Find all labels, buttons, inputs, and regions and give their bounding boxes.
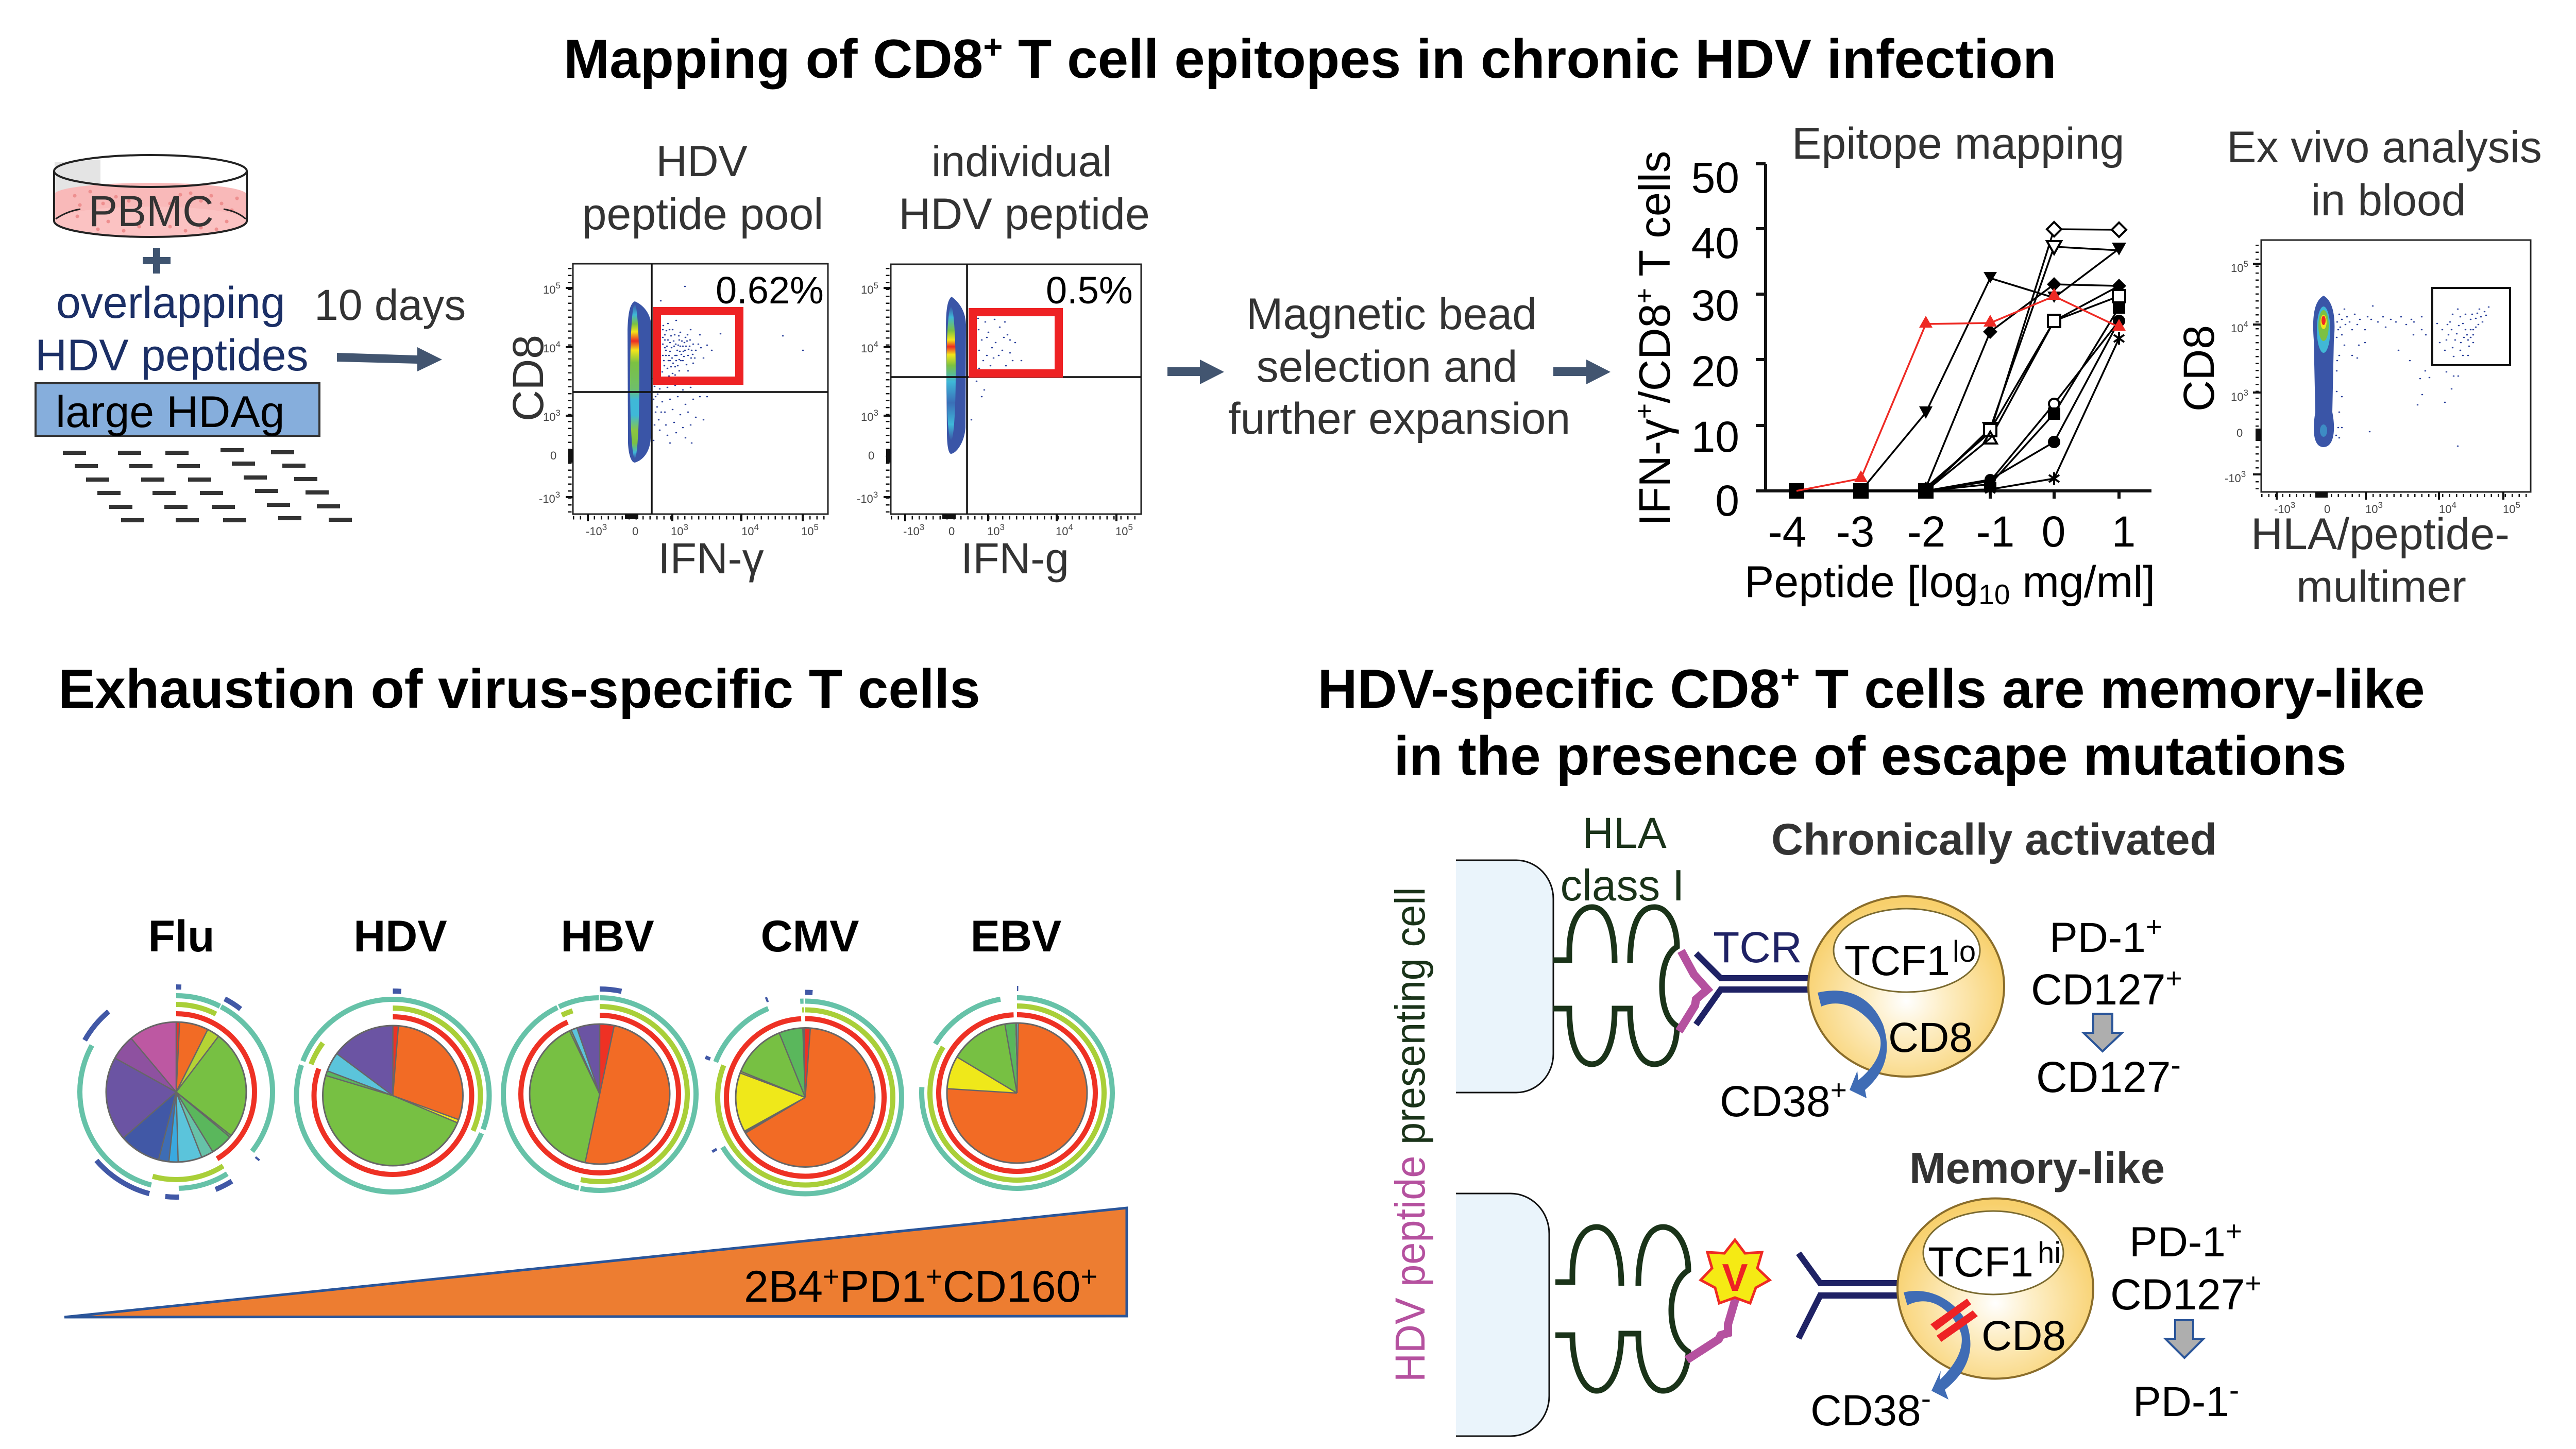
tick labels: 5: [2515, 500, 2520, 510]
antigen presenting cell: [1456, 1194, 1549, 1436]
axes: [1756, 164, 2151, 499]
heading: Memory-like: Memory-like: [1909, 1144, 2165, 1193]
HLA molecule: [1553, 907, 1677, 1064]
panel: chronically activated: [1456, 809, 2217, 1126]
y axis label: CD8: CD8: [2175, 325, 2223, 412]
y axis title: +: [1630, 403, 1659, 419]
gate: red: [657, 311, 739, 381]
y axis title: IFN-γ: [1631, 419, 1680, 526]
y tick labels: [1691, 154, 1739, 525]
heading: Chronically activated: Chronically activated: [1771, 815, 2217, 864]
tick labels: 5: [814, 522, 819, 532]
icon: escape mutation star: [1701, 1240, 1770, 1303]
scattered events: [653, 286, 803, 443]
pie: HDV: [266, 912, 519, 1222]
panel: PBMC culture setup: [35, 155, 352, 522]
pie: HBV: [471, 912, 728, 1222]
text: magnetic bead selection: selection and: [1257, 342, 1517, 391]
tick labels: 0: [2324, 503, 2330, 516]
arrow: to peptide pool: [337, 347, 442, 371]
plot frame: [2261, 240, 2531, 492]
y tick labels: 20: [1691, 347, 1739, 396]
scattered events: [2336, 306, 2489, 446]
label: CD38+: CD38: [1720, 1077, 1831, 1126]
y tick labels: 30: [1691, 281, 1739, 330]
heading: Ex vivo analysis in blood: in blood: [2311, 176, 2466, 225]
y tick labels: 0: [1715, 476, 1739, 525]
tick labels: -10: [903, 525, 920, 538]
panel: flow plot HDV peptide pool: [504, 137, 828, 583]
label: PD-1+ CD127+: PD-1: [2129, 1219, 2226, 1266]
label: CD38+: +: [1831, 1074, 1847, 1106]
label: 10 days: 10 days: [314, 281, 466, 329]
tick labels: 4: [873, 339, 878, 349]
tick labels: 0: [550, 449, 556, 462]
tick labels: -10: [586, 525, 602, 538]
label: CD38-: CD38: [1810, 1386, 1921, 1435]
x tick labels: -2: [1907, 507, 1945, 556]
label: PBMC: PBMC: [89, 187, 214, 235]
data series: red: [1797, 288, 2126, 491]
y axis title: +: [1630, 288, 1659, 303]
label: overlapping HDV peptides: overlapping: [56, 278, 285, 328]
tick labels: -10: [2274, 503, 2291, 516]
heading: Ex vivo analysis in blood: Ex vivo analysis: [2227, 123, 2542, 172]
heading: memory-like: [1317, 658, 2425, 787]
tick labels: 4: [754, 522, 759, 532]
tick labels: 10: [861, 283, 873, 296]
TCR: [1696, 953, 1808, 1025]
tick labels: 3: [2291, 500, 2295, 510]
icon: escape mutation star: V: [1722, 1256, 1748, 1299]
heading: HDV peptide pool: peptide pool: [582, 190, 823, 239]
T cell: TCF1: [1928, 1239, 2033, 1286]
x axis label: IFN-γ: IFN-γ: [658, 534, 764, 583]
tick labels: -10: [2225, 472, 2241, 485]
T cell: [1897, 1198, 2093, 1378]
peptide: [1679, 951, 1707, 1031]
label: PD-1-: -: [2229, 1374, 2239, 1407]
tick labels: 3: [2378, 500, 2383, 510]
tick labels: 0: [868, 449, 874, 462]
tick labels: 10: [861, 411, 873, 423]
heading: individual HDV peptide: HDV peptide: [899, 190, 1150, 239]
tick labels: 10: [801, 525, 814, 538]
tick labels: 10: [2503, 503, 2515, 516]
tick labels: 10: [543, 283, 555, 296]
label: HLA class I: class I: [1561, 861, 1684, 910]
x tick labels: -4: [1768, 507, 1806, 556]
markers: black: [1789, 222, 2126, 499]
wedge: 2B4+PD1+CD160+ gradient: +: [1080, 1260, 1097, 1292]
tick labels: 10: [2439, 503, 2451, 516]
box: large HDAg: large HDAg: [56, 387, 285, 437]
text: magnetic bead selection: further expansion: [1228, 394, 1570, 444]
data series: black: [1797, 229, 2119, 491]
heading: memory-like: +: [1780, 658, 1800, 695]
quadrant lines: [891, 264, 1141, 514]
peptide: [1687, 1298, 1736, 1360]
label: CD127-: CD127: [2036, 1053, 2171, 1101]
heading: Ex vivo analysis in blood: [2227, 123, 2542, 225]
heading: memory-like: HDV-specific CD8: [1317, 658, 1780, 720]
x axis label: HLA/peptide-multimer: [2251, 509, 2510, 611]
tick labels: 3: [683, 522, 688, 532]
tick labels: [857, 281, 1133, 538]
wedge: 2B4+PD1+CD160+ gradient: +: [823, 1260, 840, 1292]
text: magnetic bead selection: [1228, 289, 1570, 444]
label: overlapping HDV peptides: [35, 278, 309, 380]
panel: exhaustion pies: [28, 912, 1148, 1241]
tick labels: 10: [2231, 322, 2243, 335]
tick labels: 3: [555, 408, 561, 418]
density population: [2313, 296, 2334, 447]
panel: epitope mapping chart: [1630, 119, 2155, 610]
tick labels: 10: [543, 411, 555, 423]
ticks: [884, 268, 1141, 521]
ticks: [566, 268, 828, 521]
tick labels: [2225, 259, 2520, 516]
x axis title: Peptide [log: [1744, 557, 1978, 607]
x tick labels: 1: [2112, 507, 2136, 556]
label: PD-1+ CD127+: +: [2146, 911, 2162, 943]
x axis label: HLA/peptide-multimer: multimer: [2296, 562, 2466, 611]
x tick labels: [1768, 507, 2136, 556]
tick labels: 3: [602, 522, 607, 532]
pie: CMV: [661, 912, 950, 1241]
title: T cell epitopes in chronic HDV infection: [1003, 28, 2056, 90]
T cell: lo: [1953, 935, 1976, 968]
tick labels: 3: [920, 522, 924, 532]
plot frame: [573, 264, 828, 514]
tick labels: 3: [873, 490, 878, 500]
arrow: to epitope mapping: [1553, 360, 1611, 384]
x axis label: HLA/peptide-multimer: HLA/peptide-: [2251, 509, 2510, 559]
title: Mapping of CD8: [564, 28, 983, 90]
arrow: gray down: [2083, 1014, 2122, 1051]
tick labels: 3: [2241, 469, 2246, 479]
y axis title: T cells: [1631, 151, 1680, 288]
tick labels: 10: [1056, 525, 1068, 538]
value: 0.5%: 0.5%: [1046, 269, 1133, 312]
tick labels: -10: [857, 492, 873, 505]
pie: EBV: [886, 912, 1148, 1224]
label: PD-1+ CD127+: [2031, 911, 2182, 1014]
tick labels: 10: [543, 342, 555, 355]
tick labels: -10: [539, 492, 555, 505]
heading: individual HDV peptide: individual: [931, 137, 1112, 185]
x axis title: mg/ml]: [2010, 557, 2155, 607]
label: PD-1+ CD127+: [2110, 1215, 2262, 1319]
y tick labels: 10: [1691, 413, 1739, 461]
heading: individual HDV peptide: [899, 137, 1150, 239]
tick labels: 3: [999, 522, 1005, 532]
panel: memory-like: [1456, 1144, 2262, 1436]
T cell: [1808, 896, 2004, 1077]
text: magnetic bead selection: Magnetic bead: [1246, 289, 1537, 339]
label: HLA class I: HLA: [1582, 809, 1667, 857]
pie: HBV: HBV: [561, 912, 654, 961]
label: HLA class I: [1561, 809, 1684, 910]
heading: HDV peptide pool: [582, 137, 823, 239]
label: PD-1+ CD127+: +: [2245, 1267, 2262, 1299]
arrow: gray down: [2165, 1320, 2204, 1358]
tick labels: 0: [2236, 427, 2243, 439]
x tick labels: 0: [2042, 507, 2065, 556]
title: +: [983, 28, 1003, 65]
tick labels: [539, 281, 819, 538]
tick labels: 0: [948, 525, 955, 538]
tick labels: 3: [2243, 388, 2248, 398]
tick labels: 10: [987, 525, 999, 538]
tick labels: 4: [555, 339, 561, 349]
T cell: CD8: [1888, 1014, 1973, 1061]
pie: HDV: HDV: [353, 912, 447, 961]
T cell: hi: [2038, 1236, 2061, 1270]
x tick labels: -3: [1836, 507, 1874, 556]
y tick labels: 40: [1691, 219, 1739, 267]
tick labels: 5: [1128, 522, 1133, 532]
y axis label: CD8: CD8: [504, 335, 552, 421]
tick labels: 4: [2451, 500, 2456, 510]
HLA molecule: [1555, 1227, 1688, 1391]
icon: plus: [143, 248, 171, 274]
tick labels: 10: [671, 525, 683, 538]
label: PD-1+ CD127+: PD-1: [2049, 914, 2146, 961]
y tick labels: 50: [1691, 154, 1739, 202]
density population: [628, 301, 651, 463]
arrow: curved to CD38: [1904, 1291, 1971, 1400]
tick labels: 10: [861, 342, 873, 355]
tick labels: 3: [873, 408, 878, 418]
plot frame: [891, 264, 1141, 514]
label: PD-1+ CD127+: CD127: [2110, 1270, 2245, 1319]
wedge: 2B4+PD1+CD160+ gradient: PD1: [840, 1262, 926, 1311]
icon: culture dish: [54, 155, 247, 237]
density population: [946, 297, 966, 454]
label: PD-1+ CD127+: CD127: [2031, 965, 2165, 1014]
wedge: 2B4+PD1+CD160+ gradient: CD160: [943, 1262, 1080, 1311]
vertical label: HDV peptide presenting cell: HDV peptide presenting cell: [1386, 887, 1433, 1382]
x axis label: IFN-g: IFN-g: [961, 534, 1069, 583]
label: CD127-: -: [2171, 1049, 2181, 1082]
gate: black: [2432, 288, 2510, 365]
tick labels: 3: [555, 490, 560, 500]
tick labels: 5: [2243, 259, 2248, 269]
tick labels: 10: [741, 525, 754, 538]
icon: block bars: [1930, 1299, 1978, 1342]
label: CD38-: -: [1921, 1382, 1931, 1416]
label: PD-1+ CD127+: +: [2226, 1215, 2242, 1247]
value: 0.62%: 0.62%: [716, 269, 824, 312]
TCR: [1799, 1253, 1898, 1338]
arrow: curved to CD38: [1818, 991, 1887, 1098]
wedge: 2B4+PD1+CD160+ gradient: +: [926, 1260, 943, 1292]
scattered events: [971, 318, 1022, 420]
label: PD-1+ CD127+: +: [2165, 962, 2182, 994]
panel: ex vivo analysis in blood: [2175, 123, 2542, 611]
pie: Flu: [28, 912, 324, 1240]
ticks: [2253, 245, 2531, 500]
peptide fragments: [63, 448, 352, 522]
tick labels: 10: [2231, 390, 2243, 403]
pie: CMV: CMV: [760, 912, 859, 961]
T cell: CD8: [1981, 1312, 2066, 1359]
label: TCR: TCR: [1713, 923, 1802, 971]
heading: HDV peptide pool: HDV: [656, 137, 748, 185]
heading: memory-like: T cells are memory-like: [1800, 658, 2425, 720]
y axis title: /CD8: [1631, 303, 1680, 403]
x axis title: 10: [1978, 578, 2010, 610]
x tick labels: -1: [1976, 507, 2014, 556]
pie: Flu: Flu: [148, 912, 214, 961]
label: overlapping HDV peptides: HDV peptides: [35, 331, 309, 380]
tick labels: 5: [555, 281, 561, 291]
tick labels: 10: [1115, 525, 1128, 538]
tick labels: 10: [2231, 262, 2243, 275]
T cell: TCF1: [1844, 937, 1950, 984]
label: PD-1-: PD-1: [2133, 1378, 2229, 1425]
quadrant lines: [573, 264, 828, 514]
wedge: 2B4+PD1+CD160+ gradient: 2B4: [744, 1262, 823, 1311]
heading: Epitope mapping: Epitope mapping: [1792, 119, 2124, 168]
wedge: 2B4+PD1+CD160+ gradient: [64, 1208, 1127, 1317]
heading: memory-like: in the presence of escape mutations: [1394, 725, 2347, 787]
tick labels: 4: [2243, 319, 2248, 329]
panel: flow plot individual HDV peptide: [857, 137, 1150, 583]
heading: exhaustion: Exhaustion of virus-specific T cells: [58, 658, 980, 720]
pie: EBV: EBV: [971, 912, 1061, 961]
tick labels: 5: [873, 281, 878, 291]
antigen presenting cell: [1456, 860, 1553, 1093]
tick labels: 4: [1068, 522, 1073, 532]
tick labels: 0: [632, 525, 638, 538]
gate: red: [973, 312, 1059, 373]
arrow: to magnetic bead selection: [1167, 360, 1224, 384]
tick labels: 10: [2365, 503, 2378, 516]
